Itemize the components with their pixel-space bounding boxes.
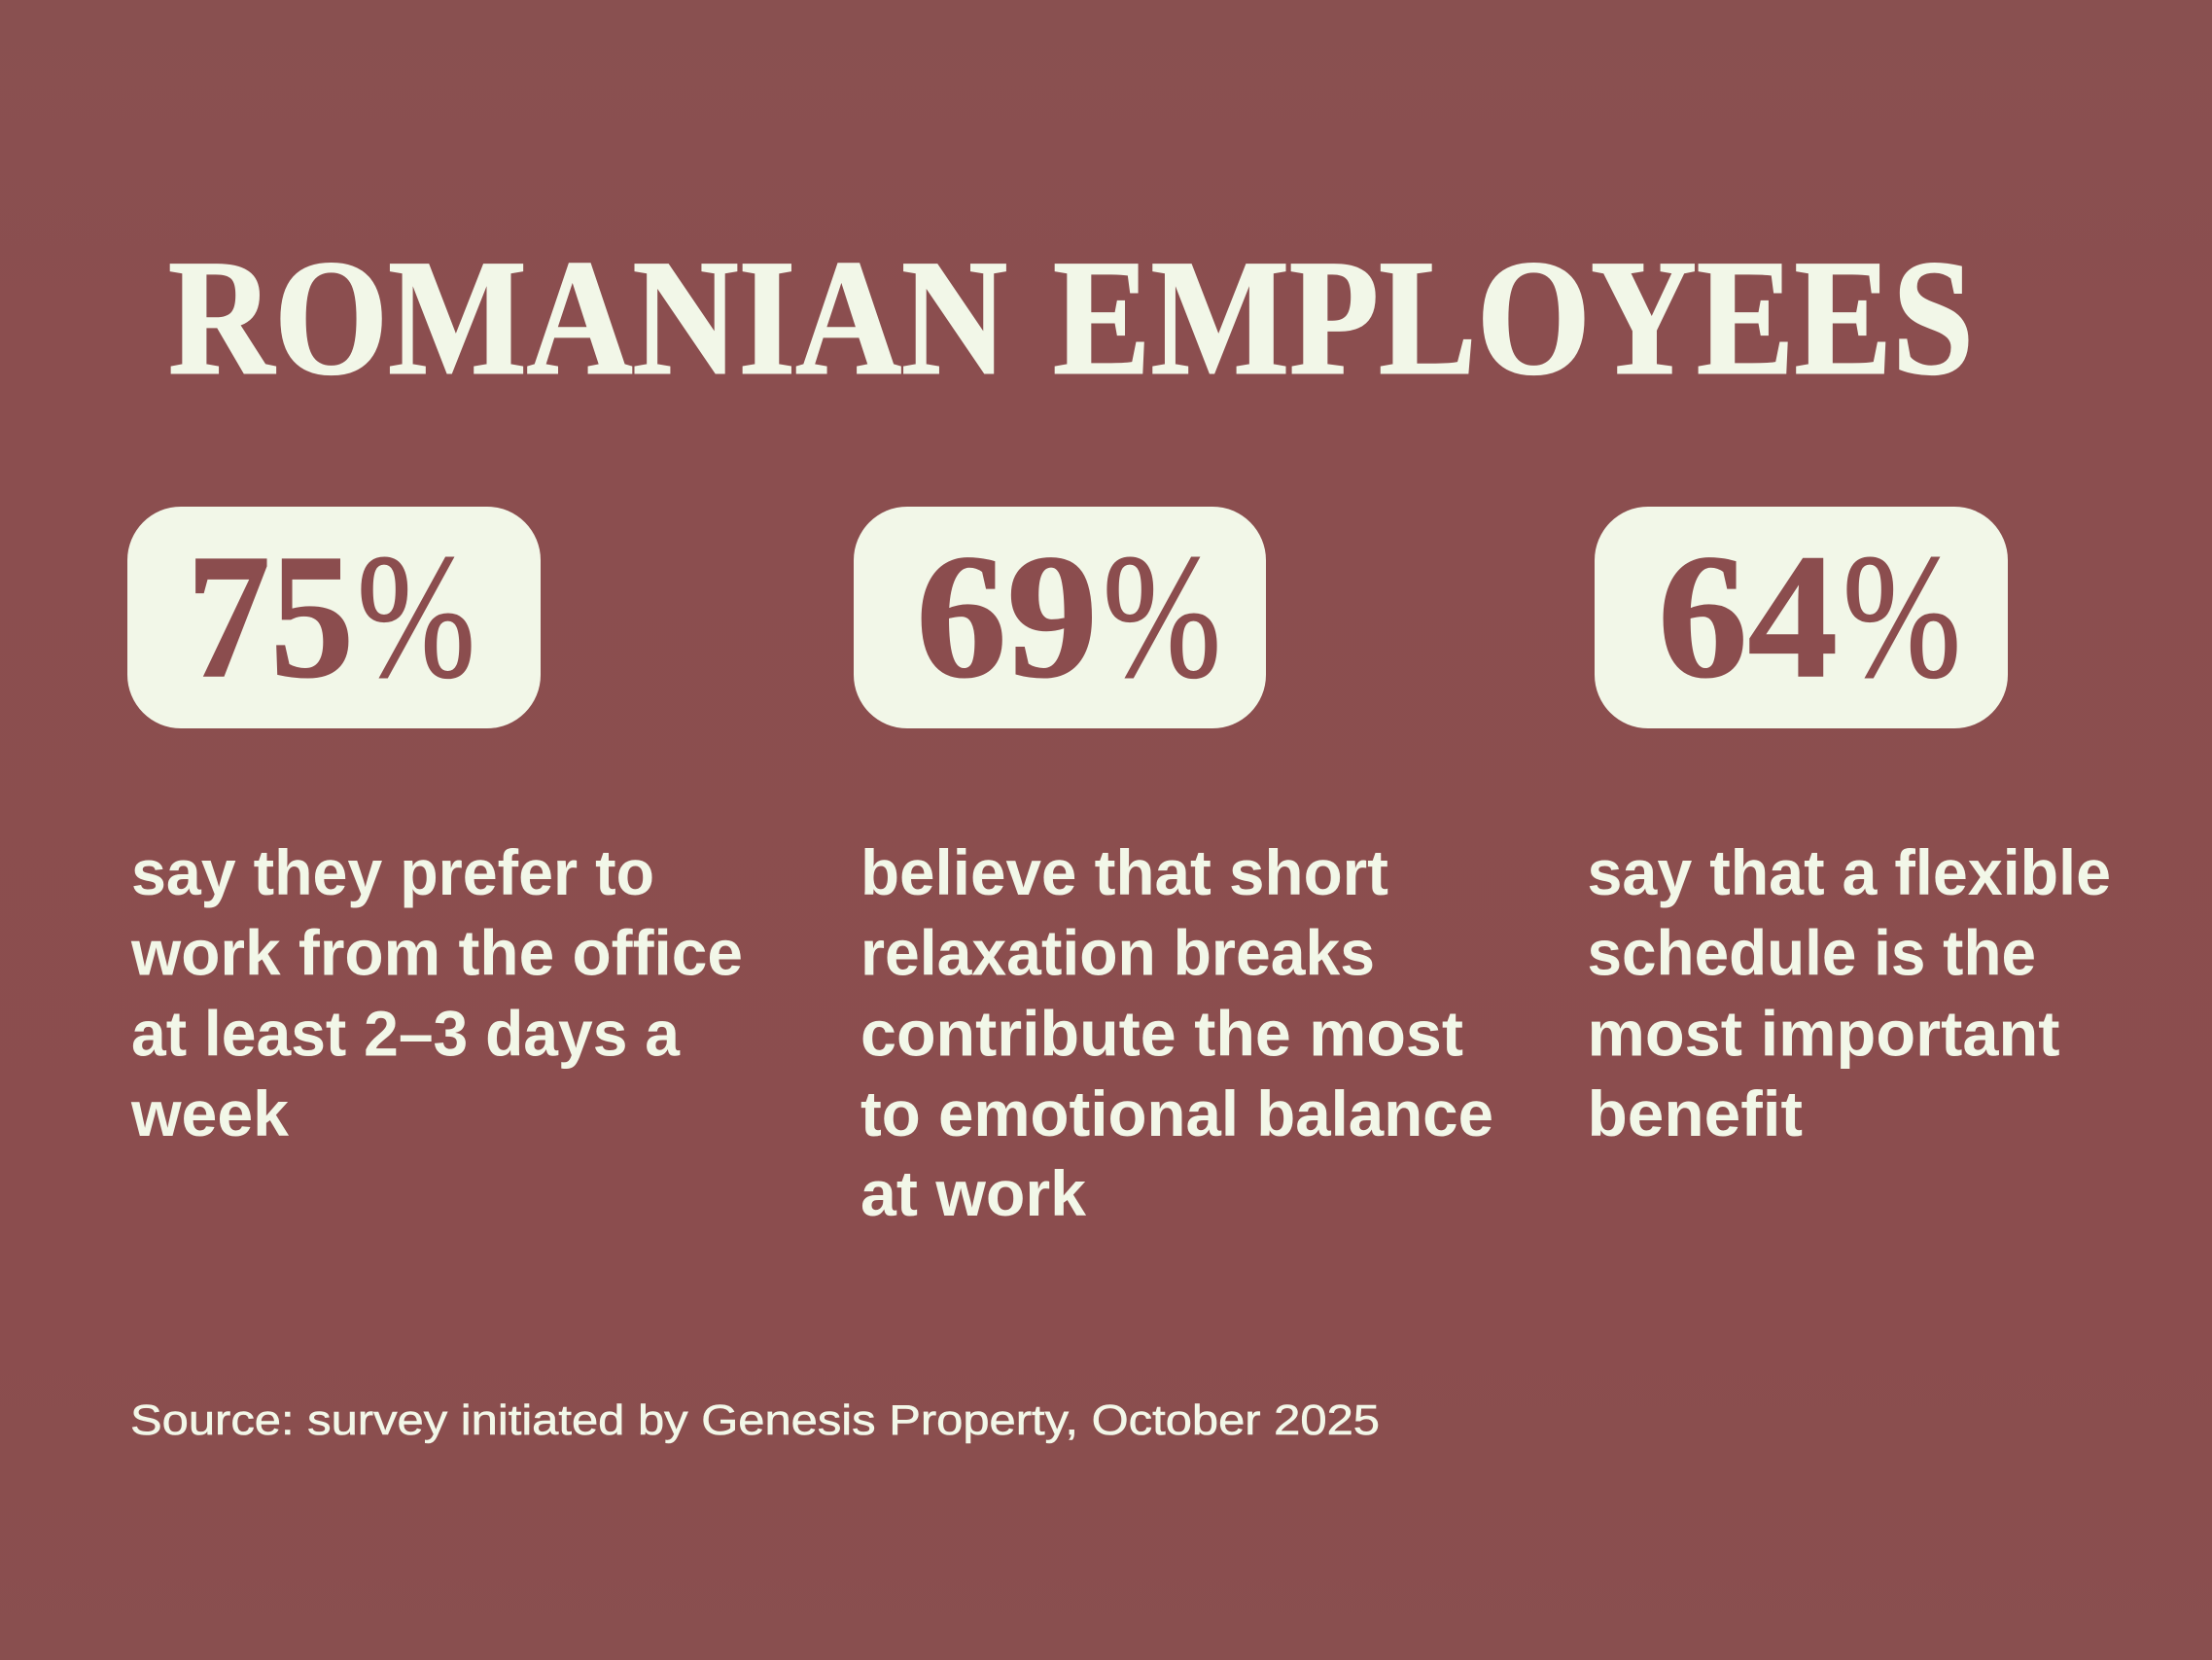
- text: 75% description: say they prefer to: [131, 836, 654, 908]
- text: 64% description: benefit: [1587, 1077, 1803, 1149]
- text: 69% description: [860, 836, 1493, 1229]
- source note: Source: survey initiated by Genesis Property, October 2025: [130, 1396, 1380, 1444]
- text: 69% description: believe that short: [860, 836, 1388, 908]
- title: ROMANIAN: [168, 226, 1007, 408]
- stat badge: 69%: [854, 507, 1266, 728]
- text: 64% description: most important: [1587, 997, 2060, 1069]
- panel: 64% statistic: [1587, 507, 2111, 1149]
- text: 75% description: week: [130, 1077, 289, 1149]
- text: 64% description: schedule is the: [1587, 917, 2036, 989]
- title: [168, 226, 1974, 408]
- stat badge: 64%: [1595, 507, 2008, 728]
- stat badge: 75%: 75: [187, 517, 354, 715]
- text: 64% description: say that a flexible: [1587, 836, 2111, 908]
- stat badge: 64%: %: [1843, 517, 1961, 715]
- stat badge: 75%: [127, 507, 541, 728]
- stat badge: 69%: %: [1103, 517, 1221, 715]
- panel: 75% statistic: [127, 507, 743, 1149]
- stat badge: 64%: 64: [1658, 517, 1838, 715]
- text: 75% description: at least 2–3 days a: [131, 997, 681, 1069]
- text: 69% description: contribute the most: [860, 997, 1463, 1069]
- stat badge: 75%: %: [357, 517, 475, 715]
- panel: 69% statistic: [854, 507, 1493, 1229]
- stat badge: 69%: 69: [916, 517, 1098, 715]
- text: 69% description: at work: [860, 1157, 1086, 1229]
- text: 75% description: work from the office: [130, 917, 743, 989]
- text: 64% description: [1587, 836, 2111, 1149]
- text: 69% description: to emotional balance: [860, 1077, 1493, 1149]
- text: 75% description: [130, 836, 743, 1149]
- text: 69% description: relaxation breaks: [860, 917, 1375, 989]
- title: EMPLOYEES: [1053, 226, 1974, 408]
